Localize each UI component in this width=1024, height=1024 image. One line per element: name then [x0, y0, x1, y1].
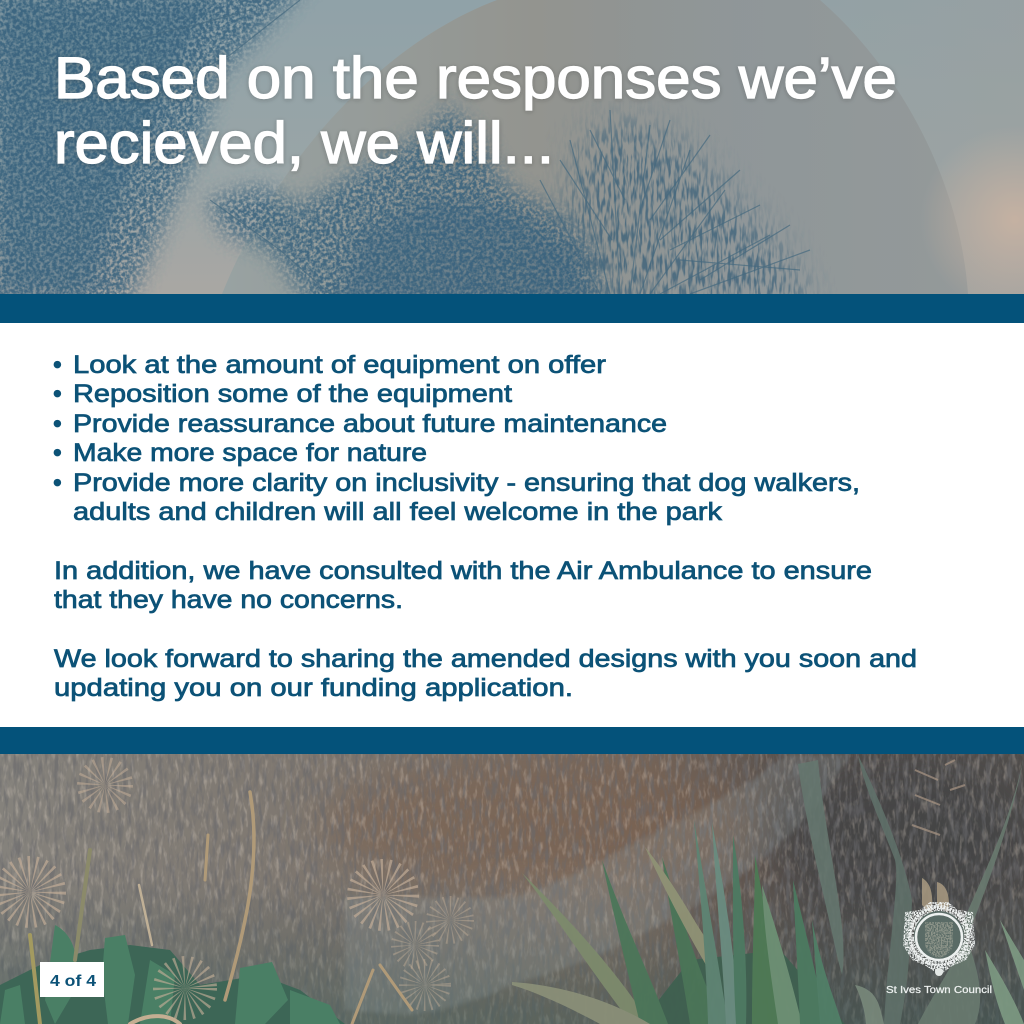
bullet list of actions: • — [53, 380, 62, 408]
bullet list of actions: • — [53, 439, 62, 467]
closing paragraph: updating you on our funding application. — [54, 674, 573, 702]
bullet list of actions: • — [53, 351, 62, 379]
dried flower heads — [12, 771, 462, 1004]
air ambulance paragraph: In addition, we have consulted with the Air Ambulance to ensure — [54, 557, 872, 585]
page counter badge: 4 of 4 — [50, 973, 96, 990]
closing paragraph — [54, 645, 917, 702]
title: recieved, we will... — [54, 111, 554, 176]
bullet list of actions: • — [53, 410, 62, 438]
panel: message body — [0, 323, 1024, 727]
bullet list of actions: Make more space for nature — [73, 439, 427, 467]
green foliage, lower left — [0, 925, 345, 1024]
air ambulance paragraph: that they have no concerns. — [54, 586, 403, 614]
bullet list of actions: Reposition some of the equipment — [73, 380, 512, 408]
bullet list of actions: • — [53, 469, 62, 497]
bullet list of actions — [53, 351, 860, 526]
translucent arch overlay — [345, 754, 850, 1015]
logo: St Ives Town Council crest — [903, 902, 975, 976]
council name: St Ives Town Council — [886, 985, 992, 996]
bullet list of actions: Provide reassurance about future maintenance — [73, 410, 667, 438]
bullet list of actions: Look at the amount of equipment on offer — [73, 351, 606, 379]
footer photo: dried flowers and spiky leaves — [0, 754, 1024, 1024]
title: Based on the responses we’ve — [54, 46, 897, 111]
bottom navy band — [0, 727, 1024, 754]
header photo: trees against a misty sky — [0, 0, 1024, 320]
closing paragraph: We look forward to sharing the amended designs with you soon and — [54, 645, 917, 673]
flower stems — [30, 792, 412, 1024]
top navy band — [0, 294, 1024, 323]
page counter badge — [40, 962, 104, 997]
right side dry grass accents — [912, 760, 965, 835]
air ambulance paragraph — [54, 557, 872, 614]
bullet list of actions: Provide more clarity on inclusivity - ensuring that dog walkers, — [73, 469, 860, 497]
title — [54, 46, 897, 176]
agave leaves — [512, 820, 845, 1024]
bullet list of actions: adults and children will all feel welcome in the park — [73, 498, 723, 526]
tall grey leaves, right — [798, 755, 1024, 1024]
